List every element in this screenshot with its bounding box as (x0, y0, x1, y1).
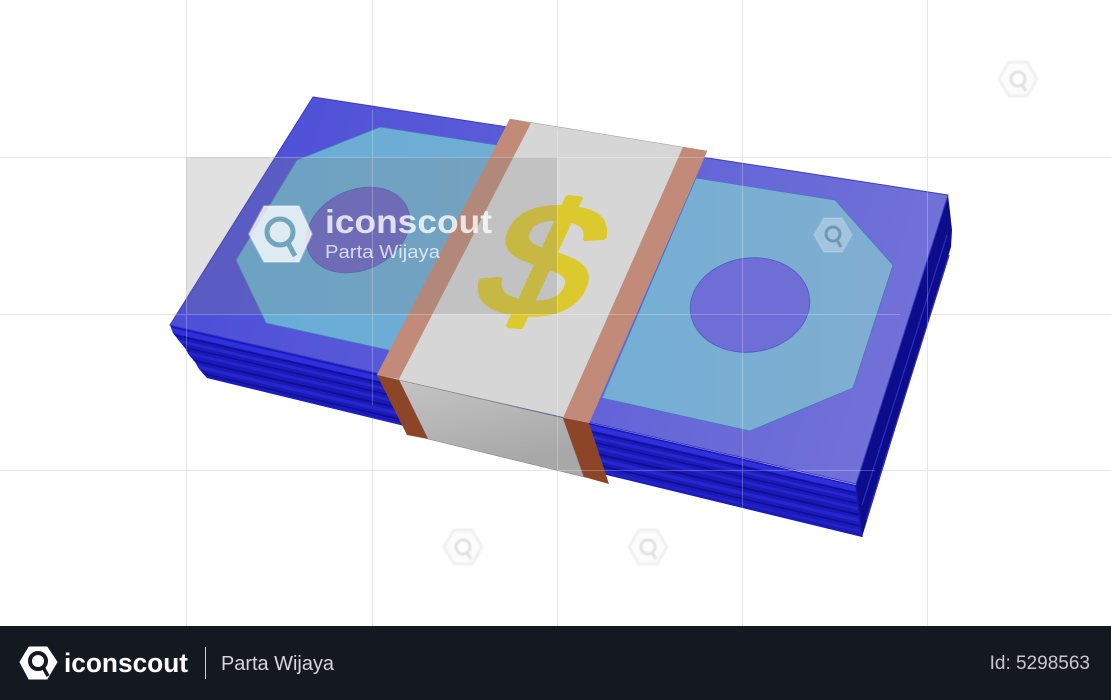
dollar sign: $ (451, 167, 637, 354)
large watermark panel (175, 110, 928, 510)
money stack illustration (160, 97, 952, 545)
left blue octagon (236, 127, 510, 352)
small watermark on banknote (814, 218, 852, 252)
footer author: Parta Wijaya (221, 653, 335, 675)
footer id: Id: 5298563 (990, 653, 1090, 674)
footer brand: iconscout (64, 648, 188, 678)
paper band side (399, 380, 584, 477)
watermark brand text: iconscout (325, 203, 492, 240)
watermark author text: Parta Wijaya (325, 242, 441, 262)
footer divider (205, 647, 206, 679)
right blue octagon (602, 178, 893, 431)
footer logo icon (20, 647, 57, 679)
band stripe left (377, 119, 531, 379)
grid overlay (175, 110, 928, 510)
footer bar (0, 626, 1111, 700)
band stripe side right (563, 418, 609, 484)
stack right side (856, 195, 952, 537)
right circle (684, 250, 816, 360)
left circle (292, 171, 424, 289)
watermark logo (249, 206, 312, 262)
small watermarks (444, 62, 1037, 564)
band stripe side left (377, 375, 428, 439)
paper band top (377, 119, 707, 423)
top banknote face (170, 97, 948, 484)
band stripe right (563, 147, 707, 423)
stack front side (160, 320, 870, 545)
